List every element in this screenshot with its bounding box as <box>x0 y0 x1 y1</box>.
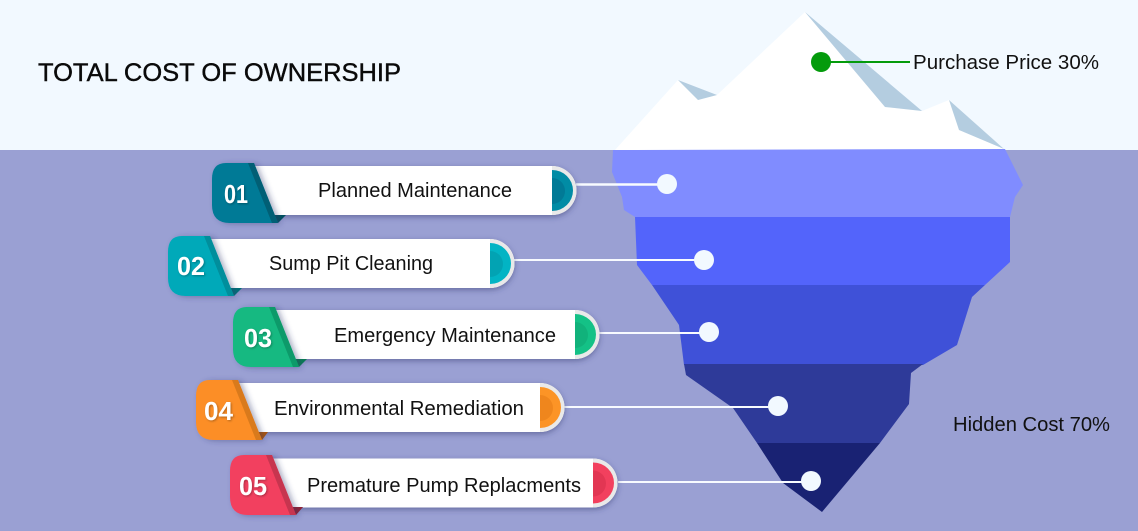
iceberg layer 2 <box>635 217 1010 285</box>
item 1: planned maintenance <box>212 163 576 223</box>
item 4: environmental remediation: Environmental Remediation <box>274 398 524 420</box>
connector 4 <box>564 396 788 416</box>
purchase price connector <box>811 52 910 72</box>
iceberg layer 5 <box>757 443 880 512</box>
item 5: premature pump replacements: 05 <box>239 471 267 501</box>
item 5: premature pump replacements <box>230 455 618 515</box>
item 3: emergency maintenance: Emergency Maintenance <box>334 325 556 347</box>
background: water <box>0 150 1138 531</box>
iceberg layer 1 <box>612 149 1023 217</box>
item 4: environmental remediation <box>196 380 564 440</box>
item 2: sump pit cleaning: 02 <box>177 251 205 281</box>
item 2: sump pit cleaning: Sump Pit Cleaning <box>269 253 433 275</box>
iceberg layer 4 <box>684 364 923 443</box>
connector 1 <box>576 174 677 194</box>
connector 5 <box>618 471 821 491</box>
item 4: environmental remediation: 04 <box>204 396 234 426</box>
connector 3 <box>599 322 719 342</box>
connector 2 <box>514 250 714 270</box>
iceberg <box>612 12 1023 512</box>
item 3: emergency maintenance: 03 <box>244 323 272 353</box>
item 1: planned maintenance: Planned Maintenance <box>318 180 512 202</box>
item 2: sump pit cleaning <box>168 236 514 296</box>
iceberg layer 3 <box>652 285 985 365</box>
item 3: emergency maintenance <box>233 307 600 367</box>
title: TOTAL COST OF OWNERSHIP <box>38 59 401 87</box>
label: hidden cost: Hidden Cost 70% <box>953 414 1110 436</box>
iceberg tip <box>615 12 1004 150</box>
label: purchase price: Purchase Price 30% <box>913 52 1099 74</box>
item 1: planned maintenance: 01 <box>224 179 248 209</box>
background: sky <box>0 0 1138 150</box>
item 5: premature pump replacements: Premature Pump Replacments <box>307 475 581 497</box>
